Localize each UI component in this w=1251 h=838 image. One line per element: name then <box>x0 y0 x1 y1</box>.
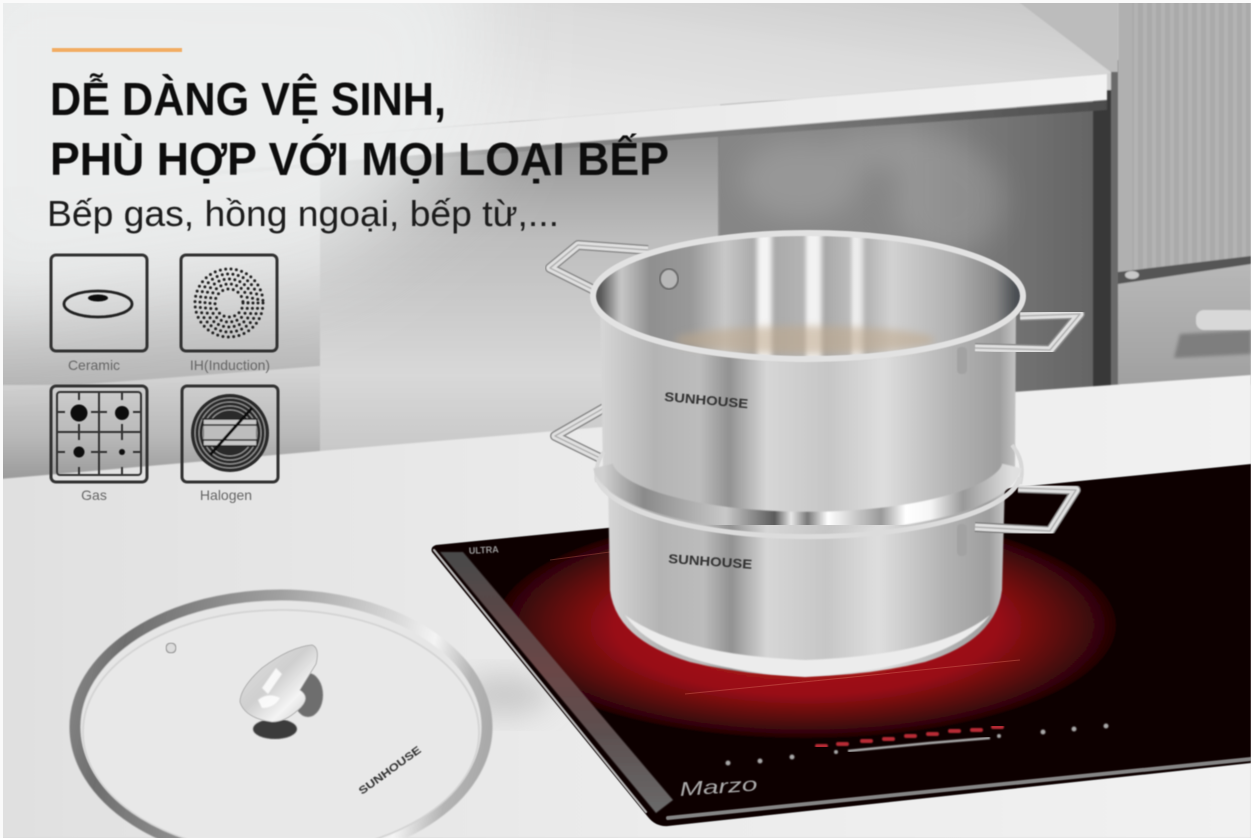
heading: PHÙ HỢP VỚI MỌI LOẠI BẾP <box>50 133 669 185</box>
hob brand: Marzo: Marzo <box>679 775 758 801</box>
icon: halogen <box>182 386 278 482</box>
fridge door <box>1118 0 1251 290</box>
pot base ring <box>625 615 990 677</box>
pot interior <box>594 233 1022 359</box>
lower right handle <box>975 488 1076 531</box>
pot rim <box>593 233 1023 359</box>
induction hob <box>432 464 1251 826</box>
steam <box>740 130 1005 255</box>
red heating zone <box>504 538 1116 738</box>
upper white shelf <box>0 0 1118 188</box>
upper right handle <box>975 314 1080 350</box>
lid knob <box>240 645 323 739</box>
logo: lower pot: SUNHOUSE <box>668 552 753 572</box>
subheading: Bếp gas, hồng ngoại, bếp từ,... <box>47 193 559 234</box>
control panel buttons <box>726 724 1108 766</box>
icon: ceramic <box>51 255 147 351</box>
lower pot lip <box>596 445 1022 484</box>
logo: upper pot: SUNHOUSE <box>664 390 749 411</box>
fridge drawer <box>1118 256 1251 385</box>
control panel slider <box>848 738 990 751</box>
label: Ceramic: Ceramic <box>68 357 120 373</box>
heading <box>50 73 669 185</box>
logo: lid: SUNHOUSE <box>357 744 424 797</box>
upper handles back <box>550 245 648 458</box>
lid vent hole <box>166 643 176 653</box>
heading: DỄ DÀNG VỆ SINH, <box>50 73 446 125</box>
label: Gas: Gas <box>81 487 107 503</box>
handle rivets <box>957 347 967 556</box>
label: Halogen: Halogen <box>200 487 252 503</box>
kitchen countertop <box>0 375 1251 838</box>
lower pot body <box>608 480 1005 676</box>
icon: gas <box>51 386 147 482</box>
icon: induction <box>181 255 277 351</box>
upper pot body <box>600 300 1016 530</box>
steamer joint band <box>597 477 1020 537</box>
glass lid <box>75 595 487 838</box>
hob left glass band <box>440 552 673 813</box>
steamer pot <box>550 233 1080 677</box>
accent line <box>52 48 182 52</box>
label: IH(Induction): IH(Induction) <box>190 357 270 373</box>
hob brand: ULTRA: ULTRA <box>469 544 499 556</box>
control panel LEDs <box>817 727 1002 746</box>
hob silver edges <box>434 550 1251 818</box>
soft white fade behind heading <box>0 0 480 320</box>
